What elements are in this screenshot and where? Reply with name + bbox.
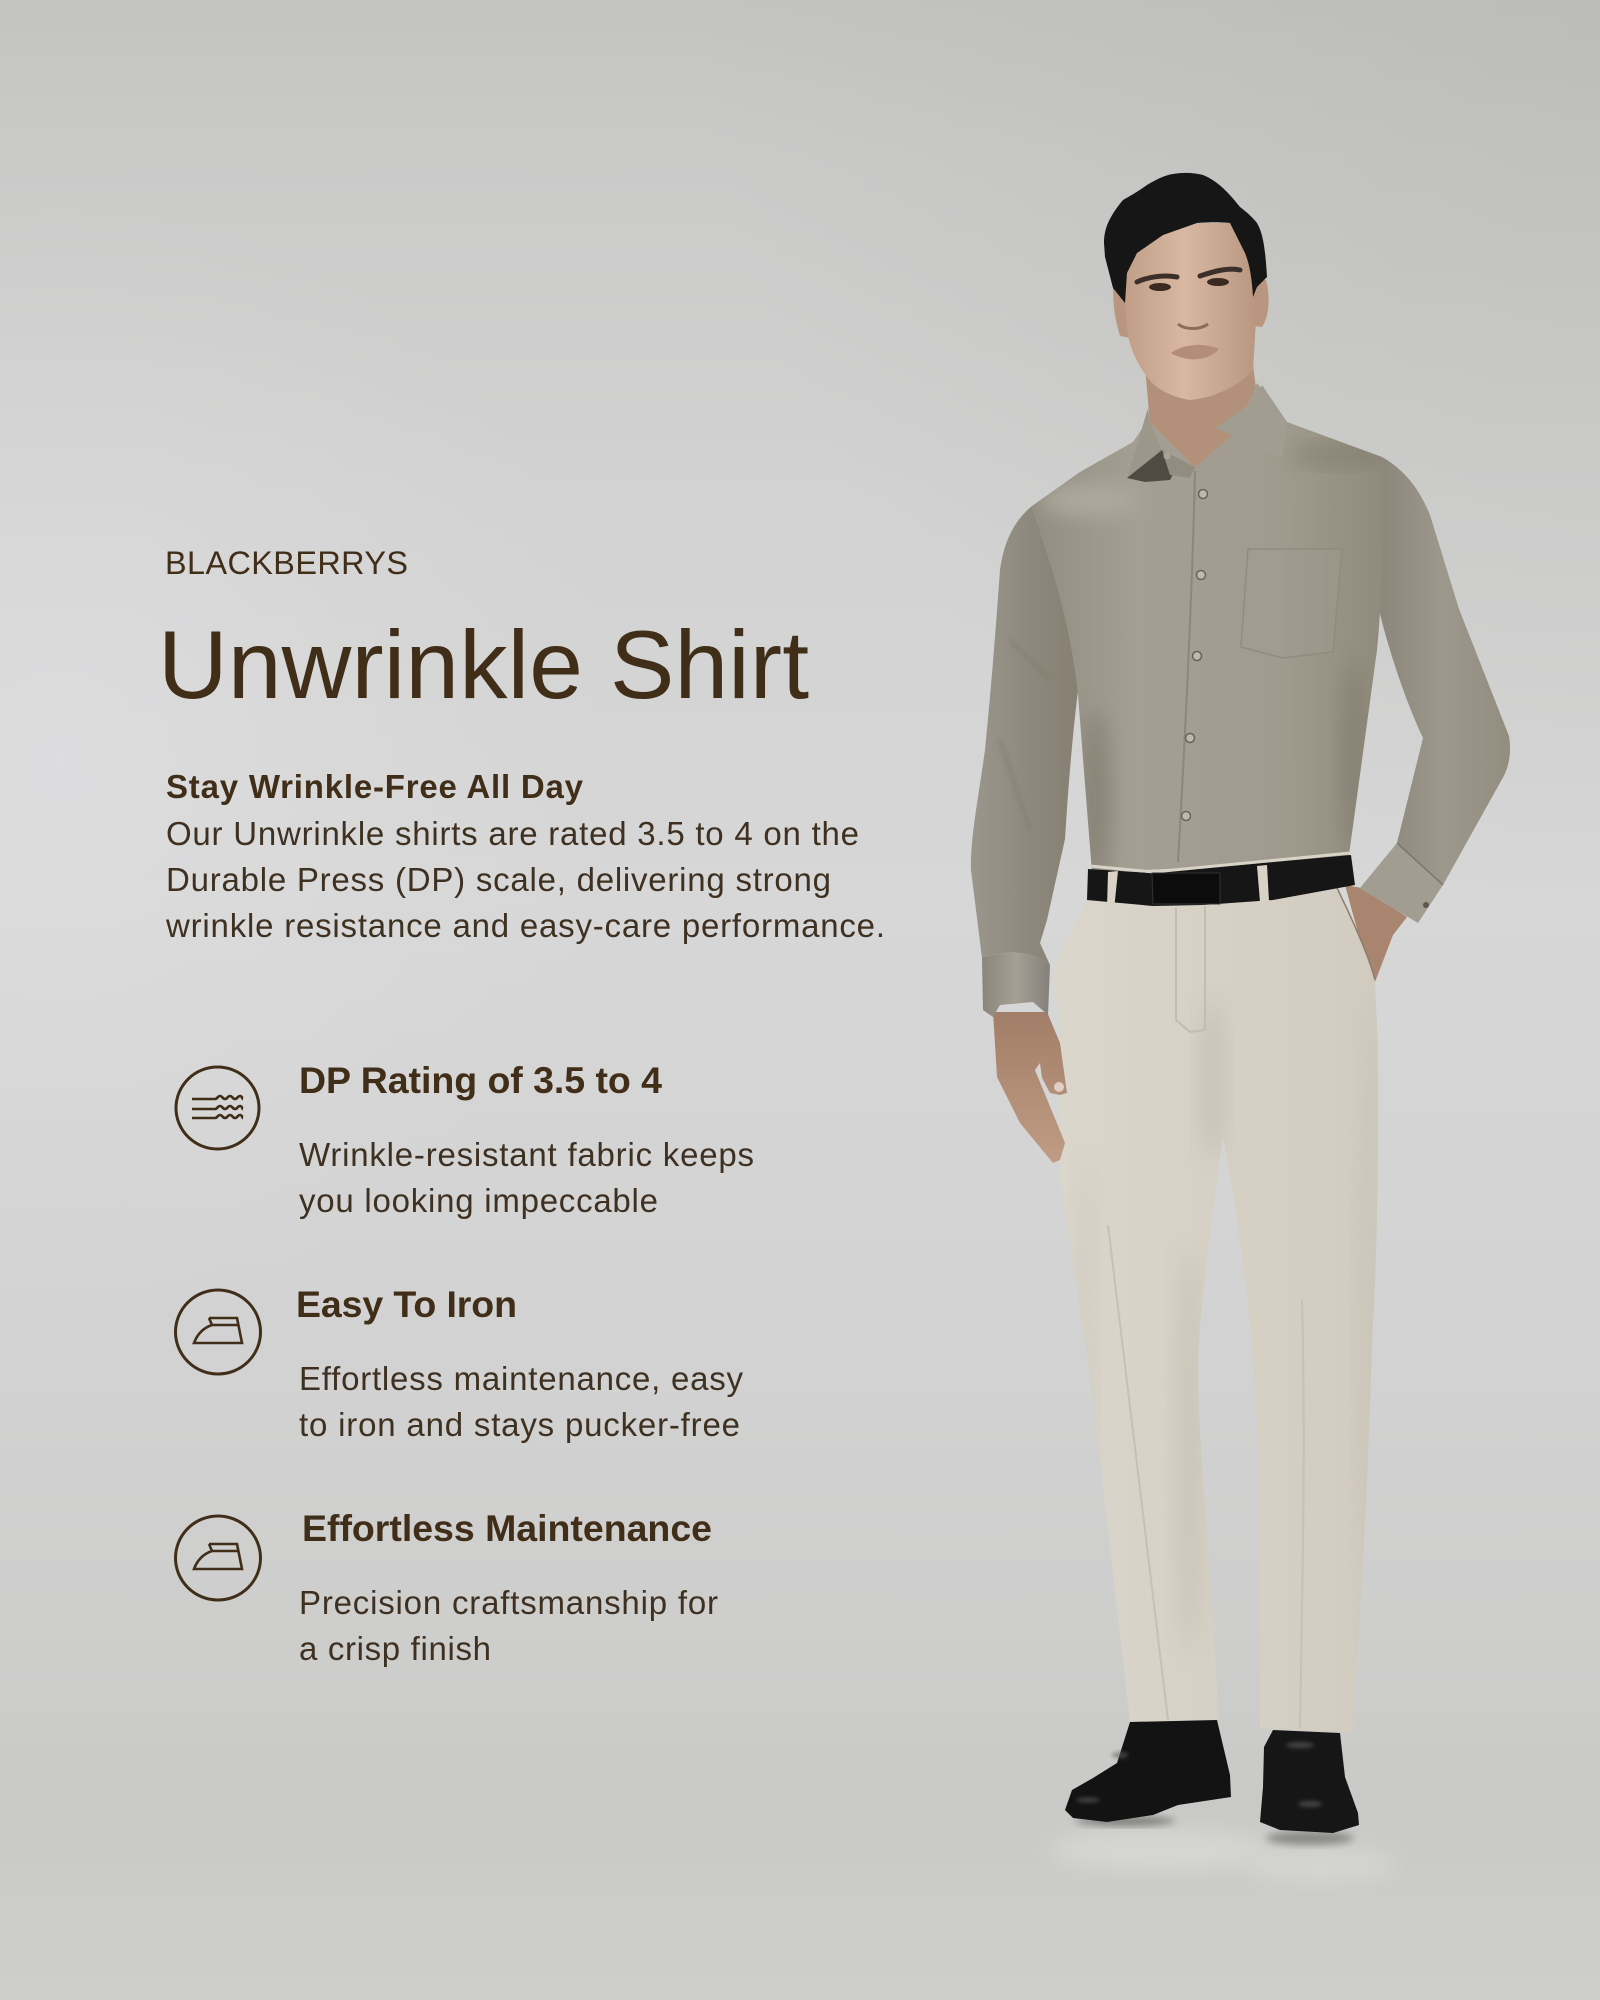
right hand in pocket	[1345, 885, 1407, 982]
placket	[1178, 471, 1195, 862]
shirt torso	[1032, 385, 1390, 890]
feature: DP rating: DP Rating of 3.5 to 4	[299, 1059, 662, 1101]
feature: easy to iron	[176, 1283, 744, 1443]
left hand	[993, 1012, 1067, 1163]
intro text block: Stay Wrinkle-Free All Day	[166, 768, 584, 805]
feature: easy to iron: Easy To Iron	[296, 1283, 517, 1325]
feature: effortless maintenance	[176, 1507, 718, 1667]
title: Unwrinkle Shirt	[158, 612, 809, 719]
nose	[1178, 324, 1208, 328]
feature: easy to iron: Effortless maintenance, easy	[299, 1360, 744, 1397]
trousers	[1052, 888, 1384, 1733]
feature: DP rating	[176, 1059, 754, 1219]
ears	[1113, 288, 1131, 338]
icon: fabric waves	[176, 1067, 259, 1149]
eyes	[1149, 283, 1171, 291]
feature: effortless maintenance: Effortless Maintenance	[302, 1507, 712, 1549]
left sleeve	[971, 506, 1078, 1017]
belt	[1087, 853, 1355, 910]
feature: DP rating: Wrinkle-resistant fabric keeps	[299, 1136, 754, 1173]
feature: effortless maintenance: Precision craftsmanship for	[299, 1584, 718, 1621]
icon: iron second	[176, 1516, 260, 1600]
intro text block: wrinkle resistance and easy-care performance.	[165, 907, 885, 944]
head	[1104, 173, 1269, 400]
feature: DP rating: you looking impeccable	[299, 1182, 658, 1219]
shoes	[1065, 1720, 1359, 1833]
intro text block	[165, 768, 885, 944]
face	[1125, 223, 1257, 400]
buttons	[1182, 490, 1208, 820]
model figure	[971, 173, 1510, 1883]
brows	[1137, 269, 1240, 282]
brand name: BLACKBERRYS	[165, 545, 408, 581]
neck	[1145, 365, 1256, 470]
icon: iron	[176, 1290, 260, 1374]
hair	[1104, 173, 1267, 303]
feature: easy to iron: to iron and stays pucker-free	[299, 1406, 740, 1443]
floor reflection and shadow	[1050, 1816, 1395, 1883]
pocket	[1241, 549, 1342, 658]
lips	[1171, 345, 1219, 359]
intro text block: Our Unwrinkle shirts are rated 3.5 to 4 on the	[166, 815, 859, 852]
feature: effortless maintenance: a crisp finish	[299, 1630, 491, 1667]
right sleeve	[1360, 457, 1510, 923]
intro text block: Durable Press (DP) scale, delivering strong	[166, 861, 831, 898]
collar	[1127, 383, 1287, 482]
